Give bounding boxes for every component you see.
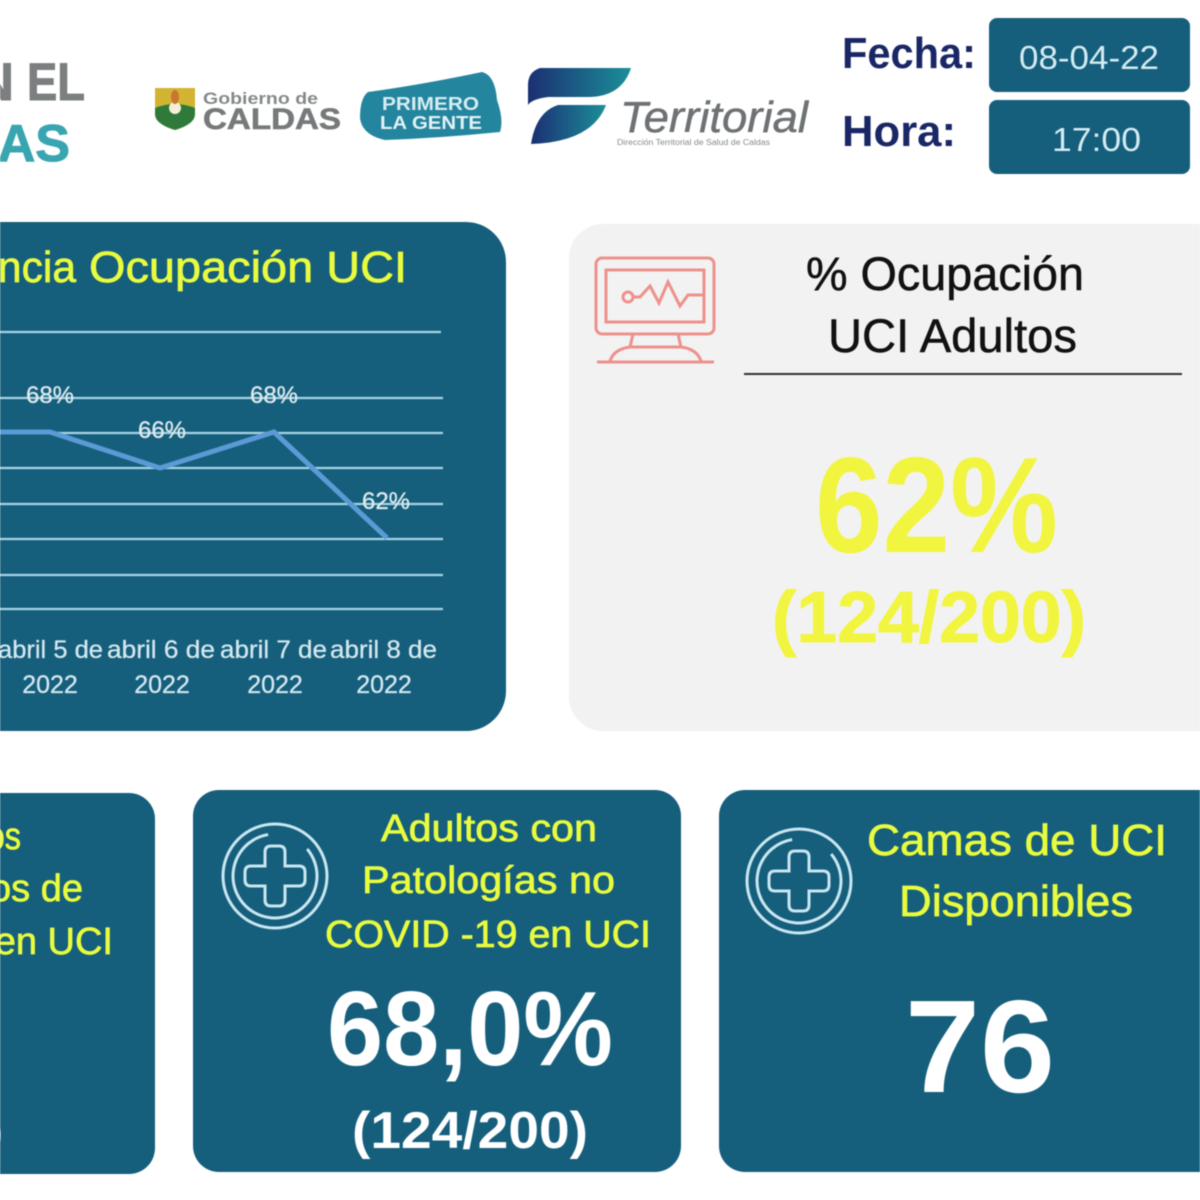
big value: 68,0%	[327, 970, 613, 1088]
logo: Gobierno de Caldas	[155, 88, 341, 136]
panel heading: % Ocupación	[806, 247, 1084, 300]
panel: adultos con patologías no COVID-19	[193, 790, 681, 1172]
line chart: 66%	[138, 417, 186, 444]
line chart: abril 7 de	[220, 636, 327, 664]
panel heading: Patologías no	[362, 860, 615, 902]
time label: Hora:	[842, 107, 956, 156]
line chart: 62%	[362, 488, 410, 515]
panel: % ocupación UCI adultos	[569, 224, 1200, 731]
cropped campaign wordmark	[0, 53, 85, 173]
icon: medical cross	[216, 817, 334, 935]
line chart: abril 5 de	[0, 636, 103, 664]
time box	[989, 100, 1190, 174]
panel heading	[867, 816, 1167, 926]
big value: 76	[905, 973, 1055, 1120]
line chart: abril 8 de	[330, 636, 437, 664]
heading divider	[744, 373, 1182, 375]
panel heading: UCI Adultos	[828, 309, 1077, 362]
panel heading	[806, 247, 1084, 362]
panel: adultos confirmados (cropped)	[0, 793, 155, 1174]
logo: Territorial: Territorial	[620, 93, 809, 142]
line chart	[0, 332, 443, 699]
header	[0, 18, 1190, 174]
line chart: 2022	[356, 671, 412, 699]
panel heading: Disponibles	[899, 877, 1133, 926]
line chart: abril 6 de	[107, 636, 215, 664]
date box	[989, 18, 1190, 92]
big value: 62%	[815, 429, 1058, 581]
line chart: 2022	[134, 671, 190, 699]
panel: tendencia ocupación UCI	[0, 222, 506, 731]
panel: camas de UCI disponibles	[719, 790, 1200, 1172]
logo: Gobierno de Caldas: CALDAS	[203, 103, 341, 136]
line chart: 2022	[247, 671, 303, 699]
value detail: (124/200)	[352, 1102, 588, 1160]
panel heading: Camas de UCI	[867, 816, 1167, 865]
logo: Primero la gente: LA GENTE	[380, 113, 482, 133]
logo: Primero la gente	[360, 72, 501, 140]
line chart: 2022	[22, 671, 78, 699]
date label: Fecha:	[842, 29, 976, 78]
value detail: (124/200)	[772, 578, 1086, 658]
logo: Primero la gente: PRIMERO	[382, 94, 479, 114]
panel heading: COVID -19 en UCI	[325, 914, 651, 956]
logo: Territorial: Dirección Territorial de Salud de Caldas	[617, 138, 770, 147]
line chart: 68%	[250, 382, 298, 409]
line chart: 68%	[26, 382, 74, 409]
cropped campaign wordmark: EL	[27, 53, 85, 112]
panel heading	[0, 816, 113, 963]
date box: 08-04-22	[1019, 39, 1159, 76]
icon: medical cross	[740, 822, 858, 940]
logo: Territorial	[528, 68, 809, 147]
chart heading: Ocupación UCI	[89, 243, 407, 292]
logo: Gobierno de Caldas: Gobierno de	[203, 89, 318, 108]
panel heading	[325, 808, 651, 956]
icon: monitor with heartbeat	[596, 258, 714, 362]
time box: 17:00	[1052, 121, 1141, 158]
panel heading: Adultos con	[381, 808, 597, 850]
